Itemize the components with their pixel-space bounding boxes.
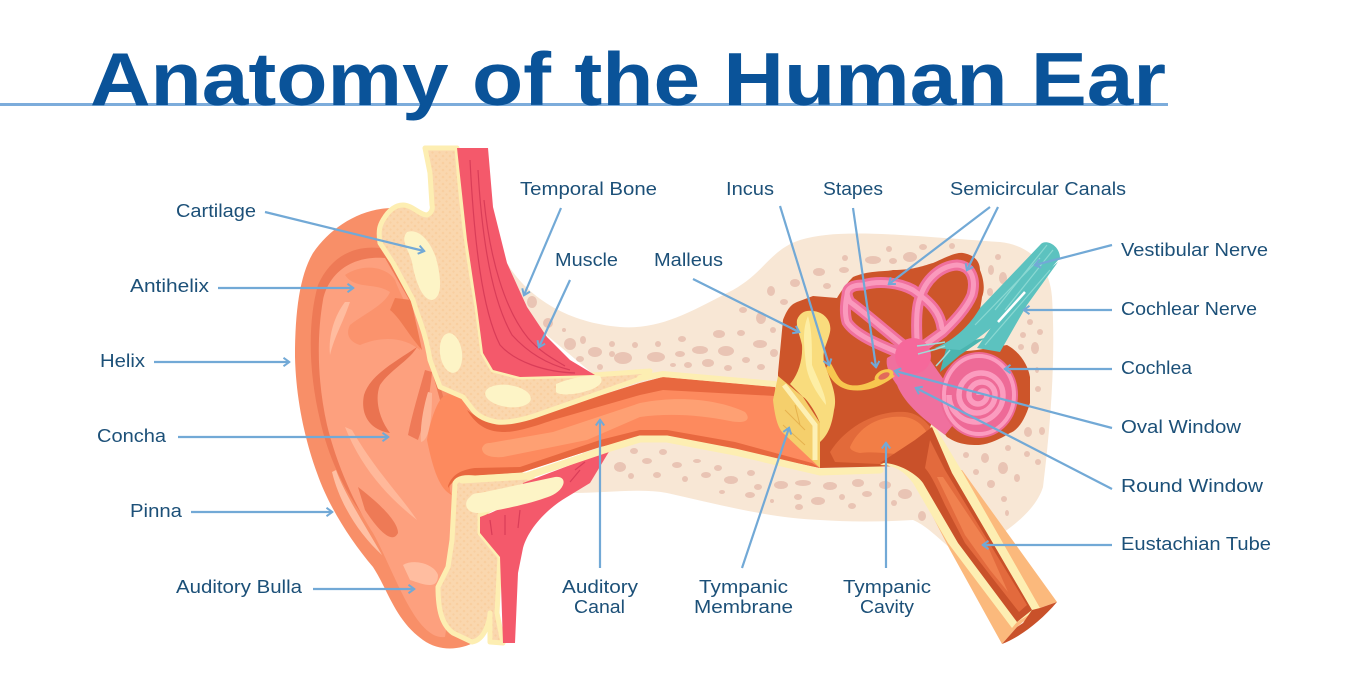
labels: Round Window bbox=[1121, 475, 1264, 496]
highlights bbox=[330, 302, 350, 355]
labels: Tympanic bbox=[843, 576, 931, 597]
labels: Incus bbox=[726, 178, 774, 199]
lower cartilage bbox=[438, 475, 540, 643]
labels: Cochlear Nerve bbox=[1121, 298, 1257, 319]
upper muscle bbox=[457, 148, 595, 377]
labels bbox=[97, 178, 1271, 617]
concha fold bbox=[363, 347, 417, 433]
temporal bone background bbox=[497, 234, 1053, 548]
labels: Auditory bbox=[562, 576, 639, 597]
labels: Pinna bbox=[130, 500, 183, 521]
ear anatomy illustration bbox=[295, 148, 1060, 648]
labels: Temporal Bone bbox=[520, 178, 657, 199]
eustachian tube bbox=[880, 423, 1057, 644]
incus and stapes bbox=[826, 362, 896, 390]
arrows and leader lines bbox=[154, 206, 1112, 589]
nerves bbox=[917, 242, 1060, 372]
auditory canal bbox=[427, 377, 820, 495]
labels: Cochlea bbox=[1121, 357, 1193, 378]
labels: Semicircular Canals bbox=[950, 178, 1126, 199]
labels: Oval Window bbox=[1121, 416, 1242, 437]
lower cartilage blob bbox=[466, 477, 564, 513]
tympanic membrane bbox=[773, 376, 820, 468]
labels: Membrane bbox=[694, 596, 793, 617]
eustachian tube outer wall bbox=[918, 470, 1057, 644]
labels: Antihelix bbox=[130, 275, 210, 296]
labels: Stapes bbox=[823, 178, 883, 199]
labels: Helix bbox=[100, 350, 146, 371]
bone spots bbox=[527, 243, 1045, 521]
cochlea bbox=[940, 352, 1018, 438]
labels: Auditory Bulla bbox=[176, 576, 303, 597]
cartilage blobs bbox=[404, 231, 602, 410]
labels: Cavity bbox=[860, 596, 915, 617]
semicircular canals and vestibule bbox=[846, 265, 973, 435]
canal wall lining bbox=[462, 374, 880, 480]
labels: Concha bbox=[97, 425, 167, 446]
antihelix fold bbox=[345, 268, 420, 350]
labels: Cartilage bbox=[176, 200, 256, 221]
labels: Canal bbox=[574, 596, 625, 617]
middle ear chamber bbox=[778, 253, 1030, 468]
malleus bbox=[790, 311, 835, 442]
lower muscle bbox=[480, 450, 610, 643]
labels: Vestibular Nerve bbox=[1121, 239, 1268, 260]
pinna outer ear bbox=[295, 208, 500, 648]
labels: Malleus bbox=[654, 249, 723, 270]
upper cartilage bbox=[379, 148, 650, 422]
title: Anatomy of the Human Ear bbox=[90, 37, 1166, 121]
labels: Eustachian Tube bbox=[1121, 533, 1271, 554]
labels: Muscle bbox=[555, 249, 618, 270]
labels: Tympanic bbox=[699, 576, 788, 597]
